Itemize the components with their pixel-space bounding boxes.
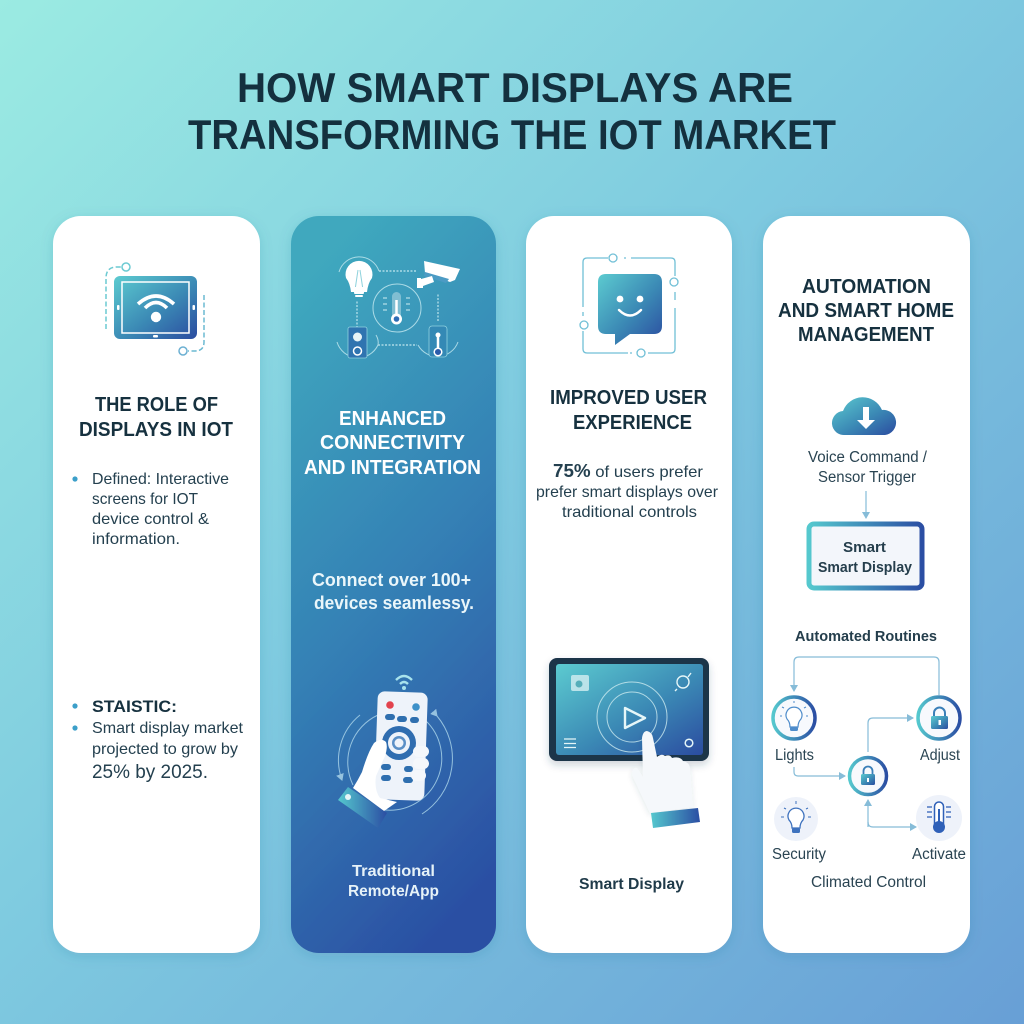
- panel: automation and smart home management: [763, 216, 970, 953]
- arrow: [865, 491, 867, 518]
- text block: 75% stat: 75% of users prefer: [553, 461, 704, 481]
- node: adjust: [918, 697, 961, 764]
- node: security: [772, 797, 826, 863]
- text block: definition: screens for IOT: [92, 491, 198, 508]
- node: adjust: Adjust: [920, 747, 961, 764]
- label: traditional remote/app: [348, 863, 439, 900]
- heading: AUTOMATION: [802, 276, 931, 298]
- text block: connect devices: Connect over 100+: [312, 570, 471, 590]
- node: security: Security: [772, 846, 826, 863]
- heading: [550, 387, 708, 434]
- text block: definition: device control &: [92, 511, 209, 528]
- heading: automated routines: Automated Routines: [795, 628, 937, 645]
- node: activate: [912, 795, 966, 863]
- title: HOW SMART DISPLAYS ARE: [237, 64, 793, 111]
- text block: connect devices: [312, 570, 474, 613]
- text block: definition: information.: [92, 531, 180, 548]
- label: traditional remote/app: Remote/App: [348, 883, 439, 900]
- text block: 75% stat: traditional controls: [562, 504, 697, 521]
- text block: voice command: Voice Command /: [808, 449, 928, 466]
- text block: statistic: STAISTIC:: [92, 697, 177, 716]
- heading: DISPLAYS IN IOT: [79, 419, 233, 441]
- label: climated control: Climated Control: [811, 874, 926, 891]
- heading: AND SMART HOME: [778, 300, 954, 322]
- title: TRANSFORMING THE IOT MARKET: [188, 111, 836, 158]
- label: traditional remote/app: Traditional: [352, 863, 435, 880]
- node: central lock: [850, 758, 886, 794]
- heading: MANAGEMENT: [798, 324, 934, 346]
- panel: improved user experience: [526, 216, 732, 953]
- heading: [79, 394, 233, 441]
- heading: [304, 408, 481, 479]
- smart display box: Smart Display: [818, 559, 913, 576]
- heading: THE ROLE OF: [95, 394, 218, 416]
- heading: CONNECTIVITY: [320, 432, 466, 454]
- text block: connect devices: devices seamlessy.: [314, 593, 474, 613]
- heading: [778, 276, 954, 346]
- label: smart display: Smart Display: [579, 876, 684, 893]
- panel: the role of displays in IoT: [53, 216, 260, 953]
- icon: cloud download: [832, 397, 896, 435]
- node: activate: Activate: [912, 846, 966, 863]
- icon: connected devices: [337, 257, 460, 358]
- icon: touching smart display: [549, 658, 709, 828]
- text block: definition: Defined: Interactive: [92, 471, 229, 488]
- heading: ENHANCED: [339, 408, 446, 430]
- icon: hand holding remote: [338, 676, 452, 828]
- text block: statistic: [72, 697, 244, 783]
- heading: EXPERIENCE: [573, 412, 692, 434]
- text block: statistic: 25% by 2025.: [92, 762, 208, 783]
- smart display box: [809, 524, 922, 588]
- text block: voice command: [808, 449, 928, 486]
- text block: 75% stat: [536, 461, 719, 521]
- text block: 75% stat: prefer smart displays over: [536, 484, 719, 501]
- text block: voice command: Sensor Trigger: [818, 469, 916, 486]
- node: lights: [773, 697, 815, 764]
- smart display box: Smart: [843, 539, 886, 556]
- icon: smiling chat bubble: [580, 254, 678, 357]
- flow diagram: routines: [772, 657, 966, 891]
- title: [188, 64, 836, 158]
- heading: IMPROVED USER: [550, 387, 708, 409]
- panel: enhanced connectivity and integration: [291, 216, 496, 953]
- node: lights: Lights: [775, 747, 814, 764]
- text block: statistic: Smart display market: [92, 720, 244, 737]
- heading: AND INTEGRATION: [304, 457, 481, 479]
- text block: statistic: projected to grow by: [92, 741, 238, 758]
- icon: tablet with wifi: [106, 263, 204, 355]
- text block: definition: [72, 471, 229, 548]
